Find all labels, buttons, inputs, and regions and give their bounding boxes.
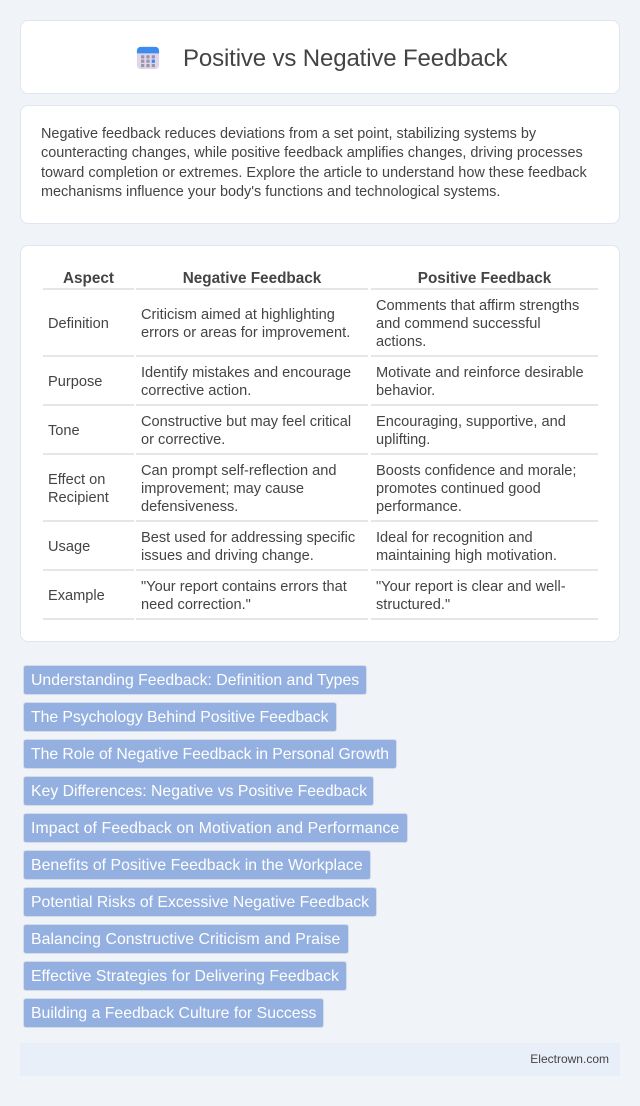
row: example: structured."	[376, 597, 450, 613]
row: tone: or corrective.	[141, 432, 225, 448]
footer bar	[20, 1043, 620, 1076]
row: purpose: Purpose	[48, 374, 102, 390]
row: tone	[48, 414, 566, 448]
row: effect on recipient: performance.	[376, 499, 462, 515]
row: example: Example	[48, 588, 105, 604]
intro paragraph	[41, 126, 587, 200]
row: effect on recipient: Can prompt self-reflection and	[141, 463, 336, 479]
row: purpose: Motivate and reinforce desirable	[376, 365, 584, 381]
table header	[63, 270, 552, 287]
header card	[20, 20, 620, 94]
row: purpose: corrective action.	[141, 383, 251, 399]
topic link	[23, 665, 367, 695]
topic link: Impact of Feedback on Motivation and Performance	[31, 820, 399, 837]
row: usage: Best used for addressing specific	[141, 530, 355, 546]
topic link: The Psychology Behind Positive Feedback	[31, 709, 328, 726]
row: effect on recipient	[48, 463, 576, 515]
row: definition: actions.	[376, 334, 426, 350]
row: purpose: behavior.	[376, 383, 435, 399]
topic link	[23, 998, 324, 1028]
row: purpose	[48, 365, 584, 399]
row: tone: Constructive but may feel critical	[141, 414, 351, 430]
row: effect on recipient: promotes continued good	[376, 481, 541, 497]
topic link	[23, 961, 347, 991]
panel: comparison table	[20, 245, 620, 642]
topic link: Key Differences: Negative vs Positive Feedback	[31, 783, 367, 800]
row: example: "Your report contains errors that	[141, 579, 347, 595]
table header: Positive Feedback	[418, 270, 551, 287]
row: example	[48, 579, 566, 613]
topic link	[23, 702, 337, 732]
row: usage: issues and driving change.	[141, 548, 314, 564]
row: definition: Comments that affirm strengths	[376, 298, 579, 314]
topic link: Potential Risks of Excessive Negative Feedback	[31, 894, 369, 911]
topic link: The Role of Negative Feedback in Personal Growth	[31, 746, 389, 763]
topic link	[23, 776, 374, 806]
topic link: Building a Feedback Culture for Success	[31, 1005, 316, 1022]
row: definition: and commend successful	[376, 316, 541, 332]
row: effect on recipient: Effect on	[48, 472, 105, 488]
row: example: need correction."	[141, 597, 251, 613]
topic link: Benefits of Positive Feedback in the Workplace	[31, 857, 363, 874]
row: tone: Encouraging, supportive, and	[376, 414, 566, 430]
row: definition: Criticism aimed at highlighting	[141, 307, 335, 323]
row: usage: maintaining high motivation.	[376, 548, 557, 564]
row: usage: Usage	[48, 539, 90, 555]
topic link: Effective Strategies for Delivering Feedback	[31, 968, 339, 985]
row: effect on recipient: Recipient	[48, 490, 109, 506]
topic link	[23, 850, 371, 880]
title: Positive vs Negative Feedback	[183, 45, 507, 72]
row: usage: Ideal for recognition and	[376, 530, 533, 546]
footer credit: Electrown.com	[530, 1052, 609, 1066]
panel: intro text	[20, 105, 620, 224]
row: definition	[48, 298, 579, 350]
intro paragraph: Negative feedback reduces deviations from a set point, stabilizing systems by	[41, 126, 536, 142]
row: effect on recipient: improvement; may cause	[141, 481, 304, 497]
comparison table	[43, 270, 598, 620]
row: tone: uplifting.	[376, 432, 430, 448]
table header: Aspect	[63, 270, 114, 287]
table header: Negative Feedback	[183, 270, 321, 287]
topic link	[23, 813, 408, 843]
row: definition: Definition	[48, 316, 109, 332]
topic link	[23, 924, 349, 954]
row: usage	[48, 530, 557, 564]
topic link list	[23, 665, 408, 1028]
row: definition: errors or areas for improvement.	[141, 325, 350, 341]
row: effect on recipient: defensiveness.	[141, 499, 238, 515]
icon: calendar	[136, 46, 160, 70]
row: effect on recipient: Boosts confidence and morale;	[376, 463, 576, 479]
topic link: Understanding Feedback: Definition and Types	[31, 672, 359, 689]
intro paragraph: mechanisms influence your body's functions and technological systems.	[41, 184, 500, 200]
topic link	[23, 739, 397, 769]
row: example: "Your report is clear and well-	[376, 579, 566, 595]
intro paragraph: toward completion or extremes. Explore the article to understand how these feedback	[41, 165, 587, 181]
topic link	[23, 887, 377, 917]
row: purpose: Identify mistakes and encourage	[141, 365, 351, 381]
row: tone: Tone	[48, 423, 80, 439]
intro paragraph: counteracting changes, while positive feedback amplifies changes, driving processes	[41, 145, 583, 161]
topic link: Balancing Constructive Criticism and Praise	[31, 931, 340, 948]
